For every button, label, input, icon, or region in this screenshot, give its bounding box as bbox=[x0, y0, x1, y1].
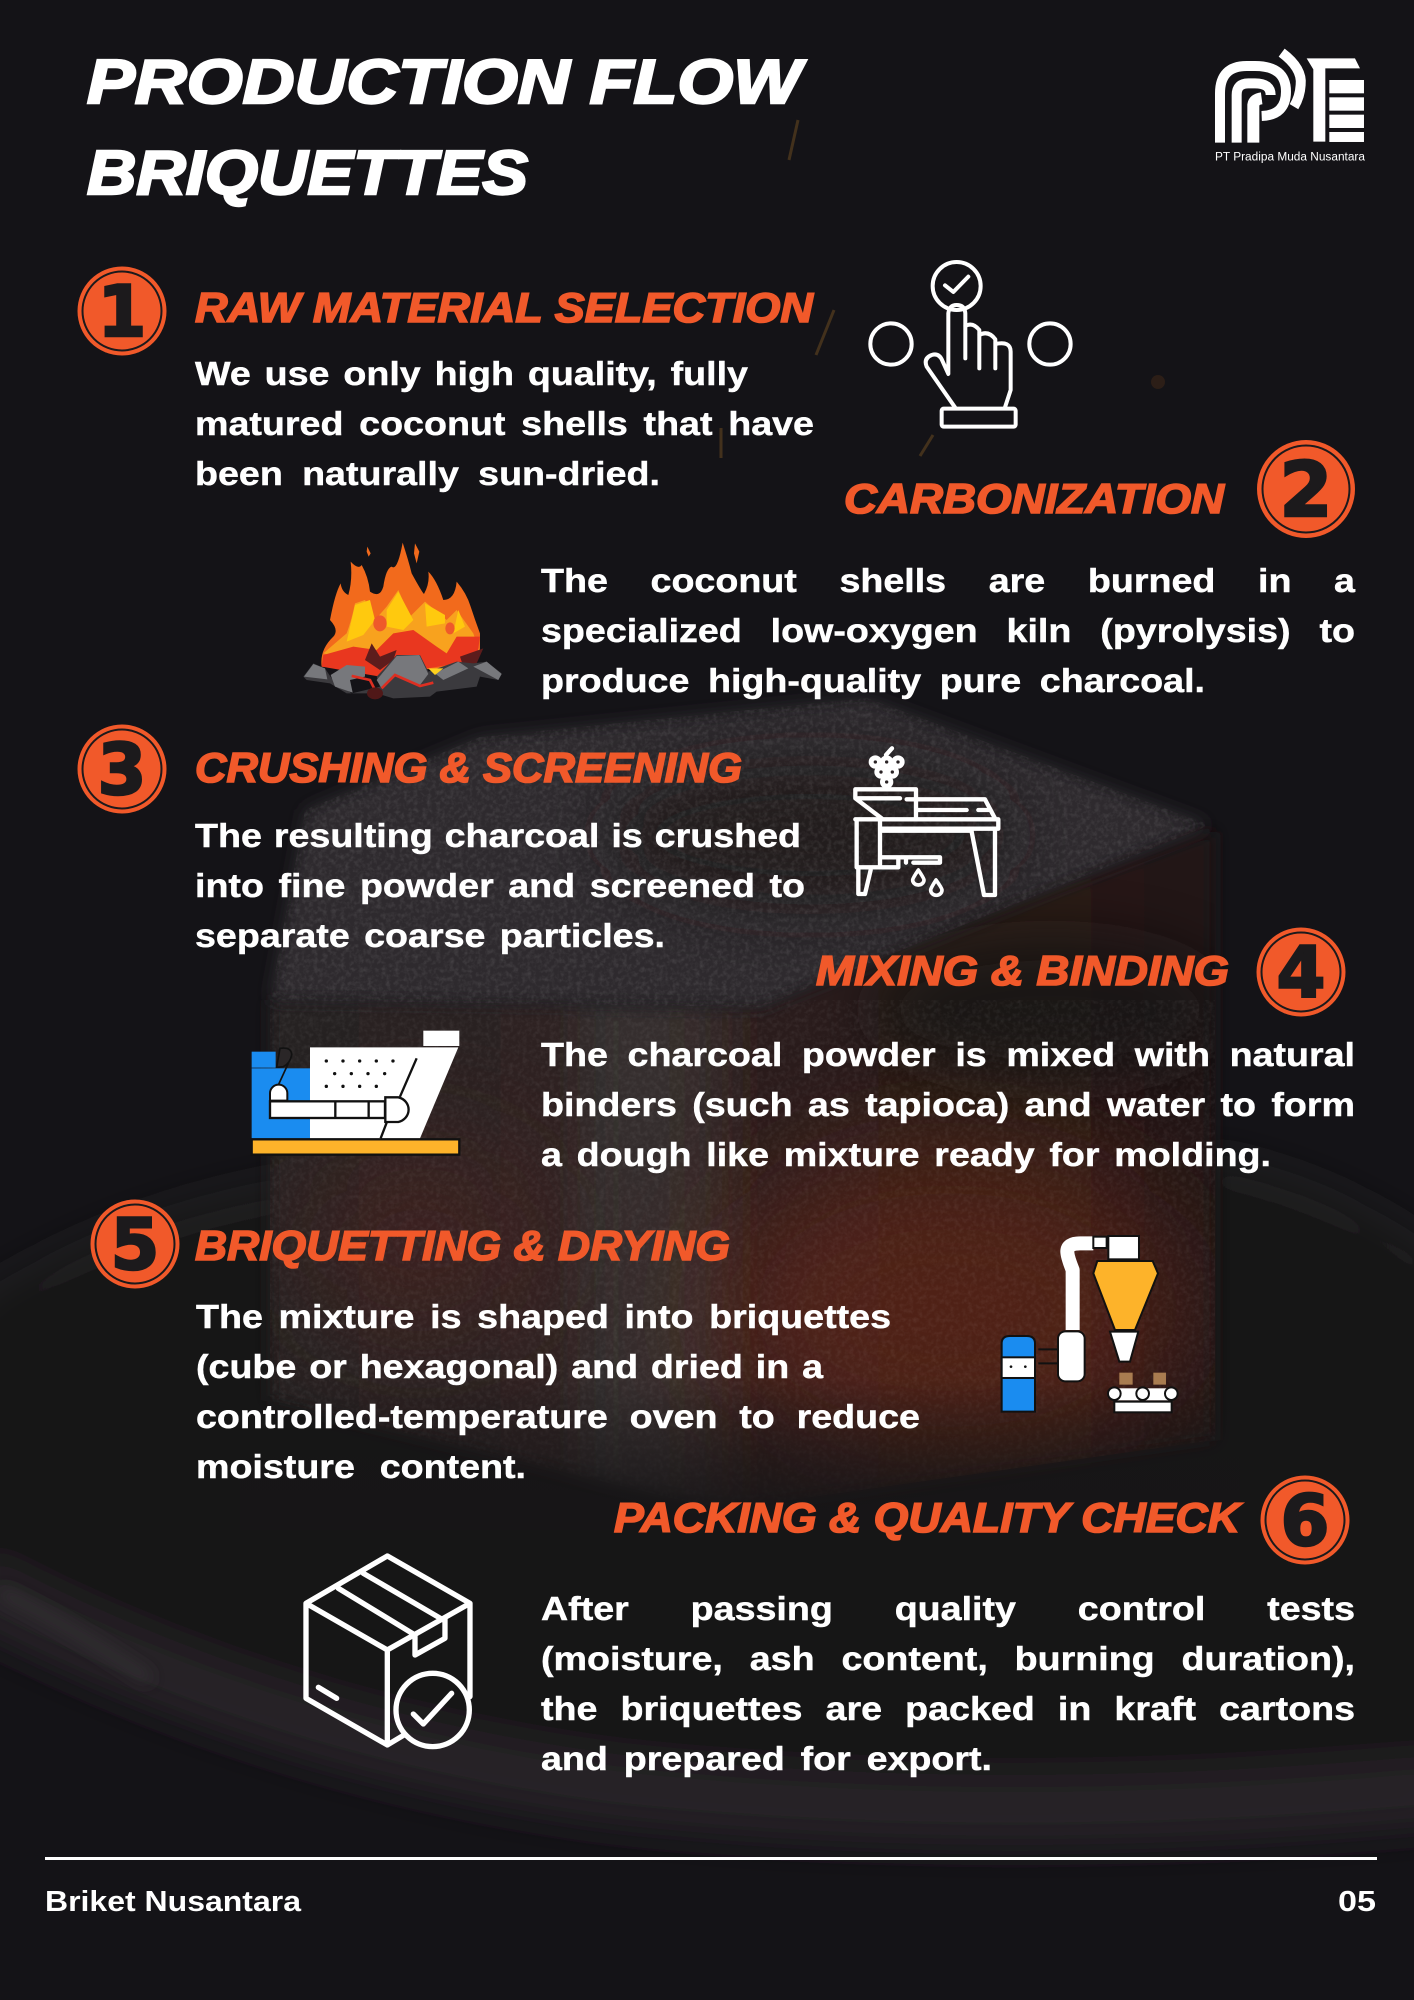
step 4 heading: MIXING & BINDING bbox=[816, 947, 1229, 994]
title: PRODUCTION FLOW bbox=[87, 48, 806, 117]
title: BRIQUETTES bbox=[87, 139, 528, 208]
step 1 body text bbox=[194, 355, 814, 492]
step 5 body text: (cube or hexagonal) and dried in a bbox=[196, 1348, 823, 1385]
step 6 body text: (moisture, ash content, burning duration), bbox=[541, 1640, 1355, 1677]
step 1 body text: We use only high quality, fully bbox=[195, 355, 748, 392]
step 3 badge bbox=[78, 724, 166, 814]
step 4 badge: 4 bbox=[1277, 932, 1325, 1014]
step 2 body text: specialized low-oxygen kiln (pyrolysis) to bbox=[541, 612, 1355, 649]
icon: box with check bbox=[306, 1556, 470, 1747]
title bbox=[87, 48, 806, 208]
step 3 body text: into fine powder and screened to bbox=[195, 867, 805, 904]
step 6 body text: and prepared for export. bbox=[541, 1740, 992, 1777]
step 6 badge: 6 bbox=[1281, 1480, 1329, 1562]
step 5 badge bbox=[90, 1200, 180, 1288]
step 3 body text bbox=[195, 817, 805, 954]
step 4 badge bbox=[1256, 928, 1346, 1016]
step 1 body text: been naturally sun-dried. bbox=[195, 455, 660, 492]
step 6 body text: After passing quality control tests bbox=[541, 1590, 1355, 1627]
logo: PT Pradipa Muda Nusantara: PT Pradipa Muda Nusantara bbox=[1215, 150, 1365, 164]
icon: drying machine bbox=[1002, 1236, 1178, 1412]
step 2 body text bbox=[541, 562, 1356, 700]
step 4 body text: binders (such as tapioca) and water to form bbox=[541, 1086, 1355, 1123]
step 3 badge: 3 bbox=[98, 729, 146, 811]
step 2 heading: CARBONIZATION bbox=[844, 475, 1226, 522]
footer rule bbox=[45, 1857, 1377, 1860]
step 3 heading: CRUSHING & SCREENING bbox=[195, 744, 742, 791]
step 6 badge bbox=[1260, 1476, 1350, 1564]
step 1 badge bbox=[78, 266, 166, 356]
step 1 body text: matured coconut shells that have bbox=[195, 405, 814, 442]
step 5 body text: controlled-temperature oven to reduce bbox=[196, 1398, 920, 1435]
step 6 heading: PACKING & QUALITY CHECK bbox=[614, 1494, 1243, 1542]
step 5 heading: BRIQUETTING & DRYING bbox=[195, 1222, 730, 1270]
icon: fire on coals bbox=[303, 543, 502, 699]
icon: hand selecting bbox=[870, 262, 1071, 427]
icon: mixing machine bbox=[252, 1031, 459, 1155]
step 6 body text: the briquettes are packed in kraft cartons bbox=[541, 1690, 1355, 1727]
footer brand: Briket Nusantara bbox=[45, 1886, 302, 1918]
icon: crushing machine bbox=[855, 748, 998, 895]
page number: 05 bbox=[1338, 1886, 1376, 1918]
step 3 body text: The resulting charcoal is crushed bbox=[195, 817, 801, 854]
logo: PT Pradipa Muda Nusantara bbox=[1215, 53, 1365, 164]
step 2 body text: produce high-quality pure charcoal. bbox=[541, 662, 1205, 699]
step 4 body text bbox=[541, 1036, 1355, 1174]
step 2 body text: The coconut shells are burned in a bbox=[541, 562, 1355, 599]
step 4 body text: a dough like mixture ready for molding. bbox=[541, 1136, 1271, 1173]
step 5 badge: 5 bbox=[111, 1204, 159, 1286]
step 2 badge bbox=[1257, 440, 1355, 538]
step 2 badge: 2 bbox=[1280, 445, 1332, 534]
step 1 heading: RAW MATERIAL SELECTION bbox=[195, 284, 815, 331]
step 5 body text bbox=[196, 1298, 920, 1485]
step 6 body text bbox=[541, 1590, 1355, 1778]
step 5 body text: moisture content. bbox=[196, 1448, 526, 1485]
step 3 body text: separate coarse particles. bbox=[195, 917, 665, 954]
step 4 body text: The charcoal powder is mixed with natural bbox=[541, 1036, 1355, 1073]
step 1 badge: 1 bbox=[98, 271, 146, 353]
step 5 body text: The mixture is shaped into briquettes bbox=[196, 1298, 891, 1335]
